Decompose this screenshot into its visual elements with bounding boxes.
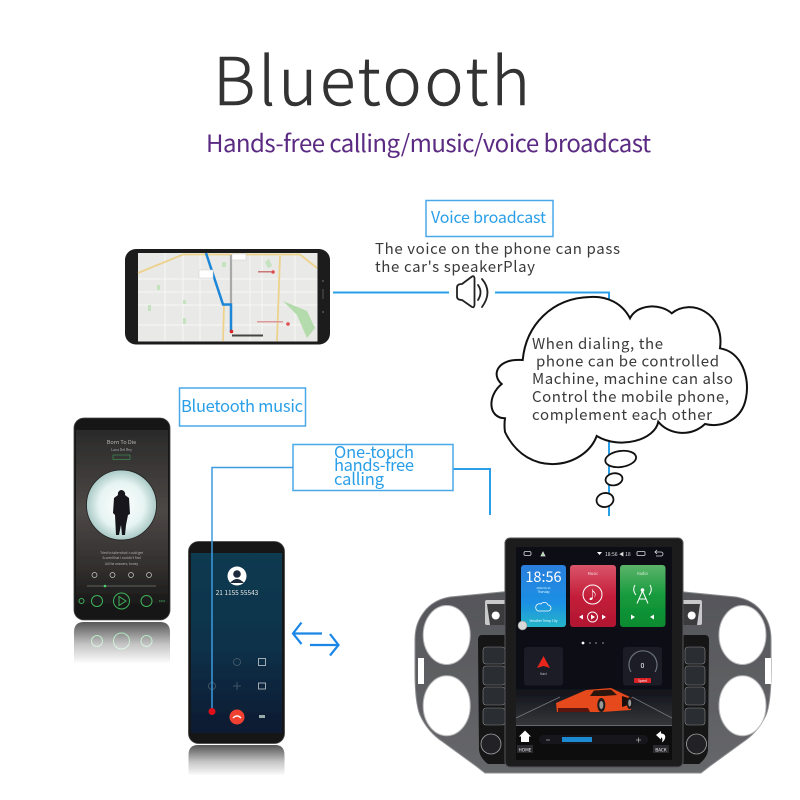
speed card	[623, 647, 662, 686]
lyrics: All the answers, honey	[105, 561, 138, 566]
status bar: 18:56	[605, 551, 618, 558]
lyrics	[100, 550, 144, 566]
connector: speaker to head unit	[495, 292, 609, 516]
hang up button	[230, 710, 244, 724]
sports car	[556, 688, 633, 712]
player controls	[79, 593, 165, 609]
artist: Lana Del Rey	[111, 448, 132, 453]
red marker dot	[208, 708, 216, 715]
connector: hands-free to head unit	[453, 469, 490, 515]
music card: ♪	[586, 586, 599, 603]
lossless tag	[113, 455, 130, 460]
icon: two-way arrows	[293, 622, 338, 656]
bubble text: When dialing, the	[532, 333, 663, 354]
tablet frame	[505, 538, 683, 767]
voice broadcast label	[426, 200, 553, 236]
call screen background	[191, 553, 282, 733]
subtitle: Hands-free calling/music/voice broadcast	[206, 124, 651, 159]
radio card	[620, 565, 666, 627]
back button: BACK	[655, 748, 667, 754]
one-touch hands-free calling label	[293, 439, 453, 490]
voice description text	[375, 238, 620, 277]
bubble text: Machine, machine can also	[532, 368, 733, 389]
navi card: Navi	[540, 671, 547, 676]
floating touch ball	[518, 621, 527, 630]
bluetooth music label: Bluetooth music	[181, 393, 303, 417]
album art	[86, 470, 156, 540]
one-touch hands-free calling label: One-touch	[334, 439, 414, 463]
bubble tail dots	[595, 449, 637, 508]
call phone reflection	[186, 744, 287, 776]
action icons	[92, 572, 152, 578]
call action icons	[208, 658, 266, 690]
music card: Music	[588, 571, 598, 577]
side slits	[418, 658, 771, 684]
song title: Born To Die	[107, 438, 136, 446]
contact avatar	[228, 566, 246, 586]
bubble text: Control the mobile phone,	[532, 386, 729, 407]
bottom control bar	[516, 726, 672, 760]
thought bubble	[491, 297, 747, 508]
voice description text: the car's speakerPlay	[375, 256, 535, 277]
icon: speaker	[457, 276, 488, 307]
left button panel	[478, 635, 508, 764]
dash bezel	[415, 592, 771, 773]
bubble text	[532, 333, 733, 425]
navi card	[524, 647, 563, 686]
tablet screen	[516, 547, 672, 760]
bubble text: phone can be controlled	[536, 350, 719, 372]
phone: map landscape	[125, 249, 330, 344]
mounting brackets	[485, 600, 702, 625]
radio card: Radio	[637, 571, 648, 577]
page dots	[582, 642, 604, 644]
home button: HOME	[519, 748, 532, 754]
connector: hands-free to call phone	[212, 468, 293, 712]
air vent openings	[423, 606, 766, 736]
more label	[259, 715, 265, 718]
lyrics: Tried to take what I could get	[100, 550, 144, 555]
status bar: ◀ 18	[619, 551, 631, 558]
clock card	[521, 565, 566, 627]
lyrics: Scared that I couldn't find	[102, 555, 141, 560]
one-touch hands-free calling label: hands-free	[334, 452, 414, 476]
progress bar	[87, 585, 156, 587]
title: Bluetooth	[213, 29, 530, 125]
music screen	[76, 430, 168, 609]
connector: map phone to speaker	[333, 292, 449, 294]
road background	[516, 689, 672, 726]
bubble text: complement each other	[532, 404, 712, 425]
status bar	[524, 550, 663, 558]
home button	[517, 730, 533, 754]
clock card: Thursday	[537, 590, 550, 594]
voice broadcast label: Voice broadcast	[431, 204, 546, 228]
music phone reflection	[72, 620, 172, 664]
music card	[570, 565, 616, 627]
speed card: 0	[641, 661, 645, 671]
car head unit	[415, 538, 771, 773]
right button panel	[680, 635, 709, 764]
bluetooth music label	[180, 388, 306, 426]
one-touch hands-free calling label: calling	[334, 466, 385, 490]
phone: call screen	[188, 542, 284, 744]
phone: music player	[74, 418, 170, 620]
clock card: 2022-04-11	[536, 586, 551, 590]
back button	[653, 731, 669, 754]
volume slider	[539, 735, 648, 744]
phone number: 21 1155 55543	[216, 587, 259, 597]
speed card: Speed	[638, 679, 647, 683]
camera dots	[322, 280, 324, 313]
voice description text: The voice on the phone can pass	[375, 238, 620, 259]
map screen	[138, 253, 318, 342]
clock card: Weather Temp City	[530, 618, 558, 623]
clock card: 18:56	[525, 566, 562, 587]
